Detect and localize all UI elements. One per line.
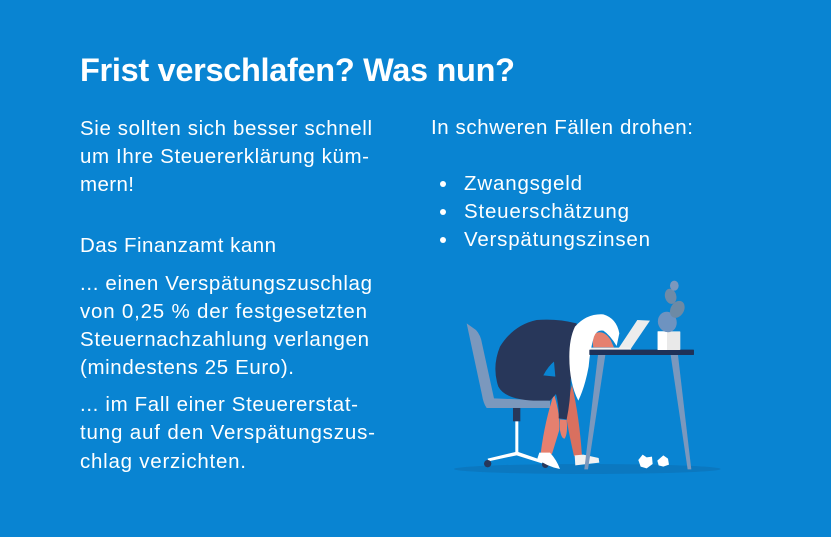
- text block: Steuererstattung: ... im Fall einer Steuererstat-: [80, 393, 358, 416]
- text block: schwere Fälle: In schweren Fällen drohen:: [431, 116, 693, 139]
- list: consequences: Zwangsgeld: [464, 172, 582, 195]
- text block: Steuererstattung: [80, 393, 375, 473]
- text block: Finanzamt heading: Das Finanzamt kann: [80, 234, 276, 257]
- text block: intro: mern!: [80, 173, 134, 196]
- text block: Steuererstattung: chlag verzichten.: [80, 450, 246, 473]
- list: consequences: Steuerschätzung: [464, 200, 629, 223]
- text block: Verspätungszuschlag: von 0,25 % der festgesetzten: [80, 300, 367, 323]
- illustration: exhausted person at desk: [454, 281, 721, 474]
- text block: intro: Sie sollten sich besser schnell: [80, 117, 372, 140]
- text block: Steuererstattung: tung auf den Verspätungszus-: [80, 421, 375, 444]
- title: Frist verschlafen? Was nun?: [80, 52, 515, 88]
- text block: Verspätungszuschlag: (mindestens 25 Euro).: [80, 356, 294, 379]
- text block: intro: um Ihre Steuererklärung küm-: [80, 145, 369, 168]
- icon: crumpled paper: [638, 455, 669, 468]
- text block: Verspätungszuschlag: [80, 272, 372, 379]
- text block: intro: [80, 117, 372, 196]
- list: consequences: [440, 172, 650, 251]
- text block: Verspätungszuschlag: Steuernachzahlung verlangen: [80, 328, 369, 351]
- list: consequences: Verspätungszinsen: [464, 228, 650, 251]
- text block: Verspätungszuschlag: ... einen Verspätungszuschlag: [80, 272, 372, 295]
